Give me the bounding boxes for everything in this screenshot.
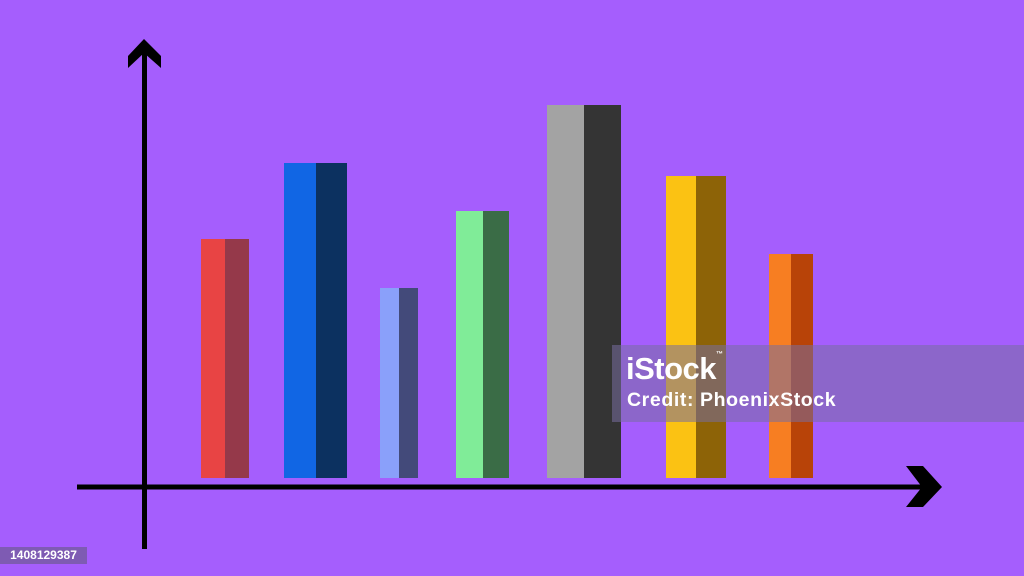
bar: blue [284,163,347,478]
image id label: 1408129387 [10,548,77,562]
watermark band [612,345,1024,422]
bar: light blue [380,288,418,478]
watermark credit: Credit: PhoenixStock [627,389,836,411]
image id label [0,547,87,564]
bar: gray [547,105,621,478]
x axis with arrow [77,466,942,507]
bar: orange [769,254,813,478]
bar: red [201,239,249,478]
watermark logo: iStock™ [626,351,723,386]
bar: green [456,211,509,478]
y axis with arrow [128,39,161,549]
bar: yellow [666,176,726,478]
